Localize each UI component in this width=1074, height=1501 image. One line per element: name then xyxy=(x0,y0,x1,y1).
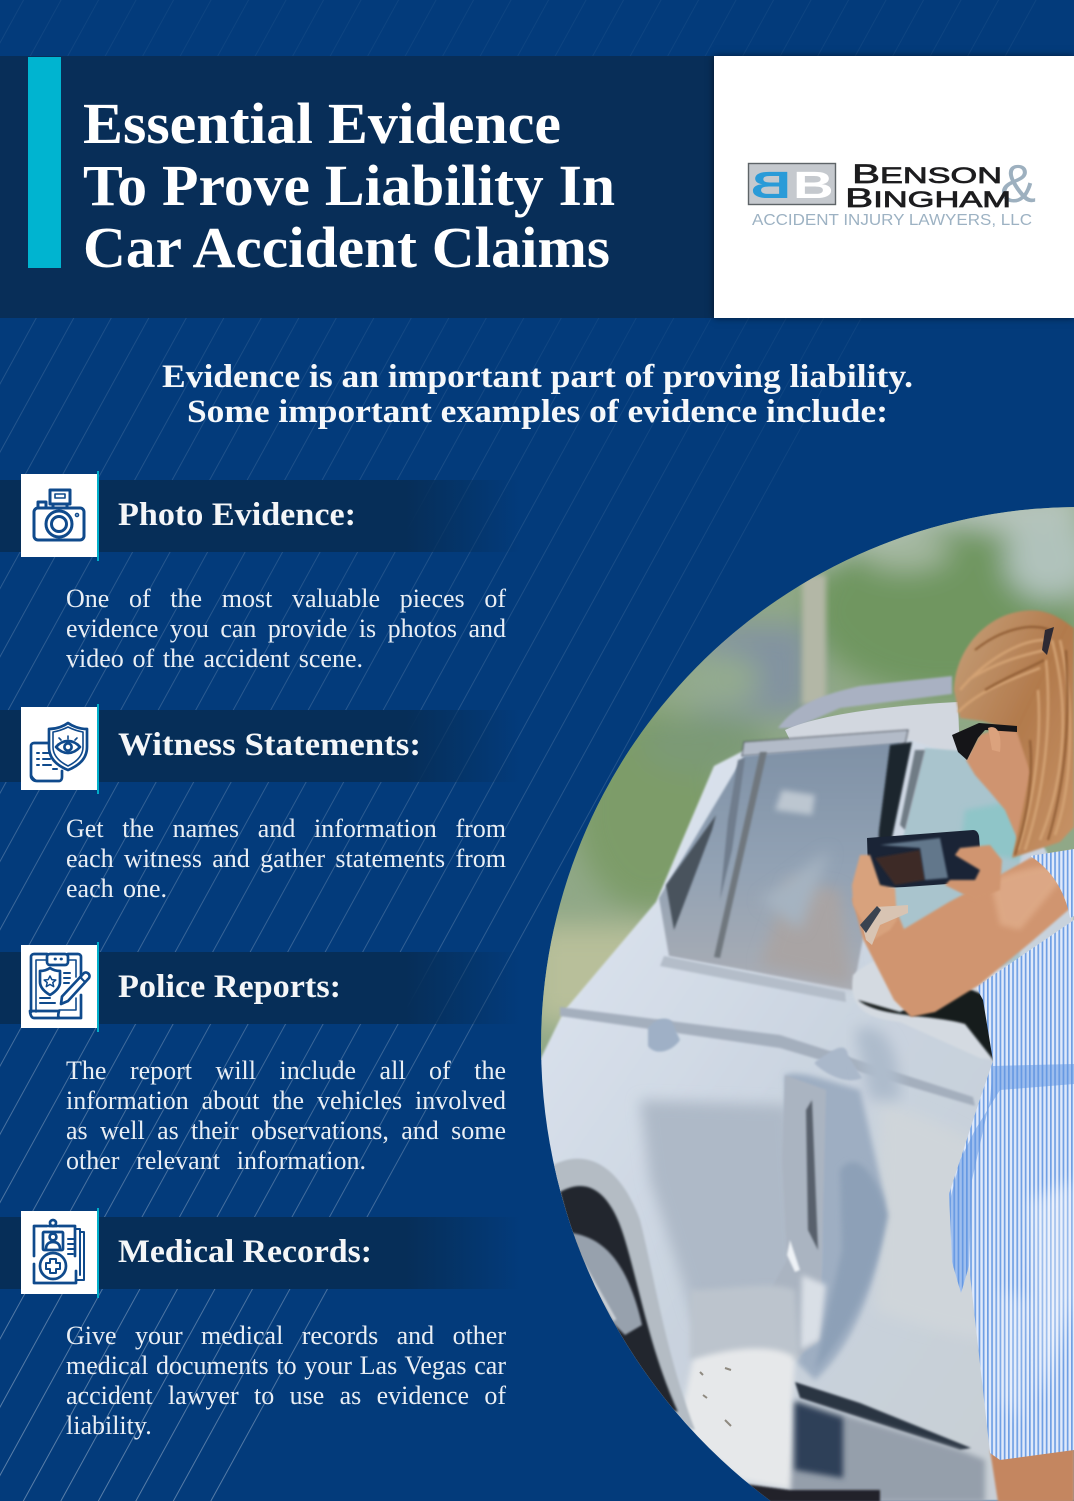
logo: Benson & Bingham: ACCIDENT INJURY LAWYERS, LLC xyxy=(752,212,1032,229)
icon: medical records xyxy=(21,1211,97,1294)
text block: each one. xyxy=(66,874,167,903)
text block: Get the names and information from xyxy=(66,814,506,843)
icon: camera xyxy=(21,474,97,557)
ear xyxy=(988,727,1000,752)
title: Car Accident Claims xyxy=(83,215,610,280)
door pillar xyxy=(876,740,914,888)
blurred trees background xyxy=(530,490,1074,1060)
car upper body and roof xyxy=(540,676,1074,1501)
panel: medical records xyxy=(0,1208,506,1440)
sunglasses xyxy=(952,723,1017,760)
logo: Benson & Bingham: B ENSON xyxy=(852,159,1002,189)
logo: Benson & Bingham: B xyxy=(750,165,791,207)
text block: liability. xyxy=(66,1411,152,1440)
text block: other relevant information. xyxy=(66,1146,366,1175)
heading: Photo Evidence: xyxy=(118,497,356,533)
woman xyxy=(852,610,1074,1501)
car rear windows xyxy=(659,743,900,990)
title: Essential Evidence xyxy=(83,91,561,156)
dress strap xyxy=(1030,849,1074,918)
wheel arch and headlight xyxy=(548,1159,695,1430)
phone xyxy=(867,830,982,888)
text block: as well as their observations, and some xyxy=(66,1116,506,1145)
title: To Prove Liability In xyxy=(83,153,615,218)
text block: video of the accident scene. xyxy=(66,644,363,673)
side mirror xyxy=(852,964,998,1058)
logo: Benson & Bingham: & xyxy=(1000,154,1036,214)
intro text: Evidence is an important part of proving liability. xyxy=(162,359,913,395)
text block: One of the most valuable pieces of xyxy=(66,584,506,613)
dress xyxy=(949,920,1074,1460)
text block: The report will include all of the xyxy=(66,1056,506,1085)
heading: Police Reports: xyxy=(118,969,341,1005)
window sill trim xyxy=(660,956,846,1002)
title xyxy=(83,91,615,280)
dress belt and sash xyxy=(950,1064,1074,1293)
panel: photo evidence xyxy=(0,471,506,673)
side strip and sill xyxy=(795,1382,971,1450)
car lower body damage xyxy=(548,1007,985,1501)
panel: witness statements xyxy=(0,704,506,903)
text block: information about the vehicles involved xyxy=(66,1086,506,1115)
front window xyxy=(892,748,1020,966)
logo panel xyxy=(714,56,1074,318)
ponytail and hair xyxy=(954,610,1074,858)
header panel xyxy=(0,56,714,318)
text block xyxy=(66,1056,506,1175)
intro text xyxy=(162,359,913,430)
hands xyxy=(852,855,897,940)
photo: woman photographing damaged white car xyxy=(541,507,1074,1501)
intro text: Some important examples of evidence include: xyxy=(187,394,888,430)
face and neck xyxy=(965,730,1030,838)
text block: each witness and gather statements from xyxy=(66,844,506,873)
watch xyxy=(862,905,908,945)
cyan accent bar xyxy=(28,57,61,268)
text block: accident lawyer to use as evidence of xyxy=(66,1381,506,1410)
logo: Benson & Bingham xyxy=(748,154,1036,229)
text block xyxy=(66,1321,506,1440)
text block: Give your medical records and other xyxy=(66,1321,506,1350)
icon: shield with eye and document xyxy=(21,707,97,790)
icon: police report xyxy=(21,945,97,1028)
text block xyxy=(66,814,506,903)
panel: police reports xyxy=(0,942,506,1175)
text block xyxy=(66,584,506,673)
heading: Medical Records: xyxy=(118,1234,372,1270)
text block: medical documents to your Las Vegas car xyxy=(66,1351,506,1380)
text block: evidence you can provide is photos and xyxy=(66,614,506,643)
logo: Benson & Bingham: B xyxy=(793,165,834,207)
upper arm and forearm xyxy=(852,850,1074,1017)
legs xyxy=(988,1450,1074,1501)
heading: Witness Statements: xyxy=(118,727,421,763)
logo: Benson & Bingham: B INGHAM xyxy=(845,183,1011,213)
